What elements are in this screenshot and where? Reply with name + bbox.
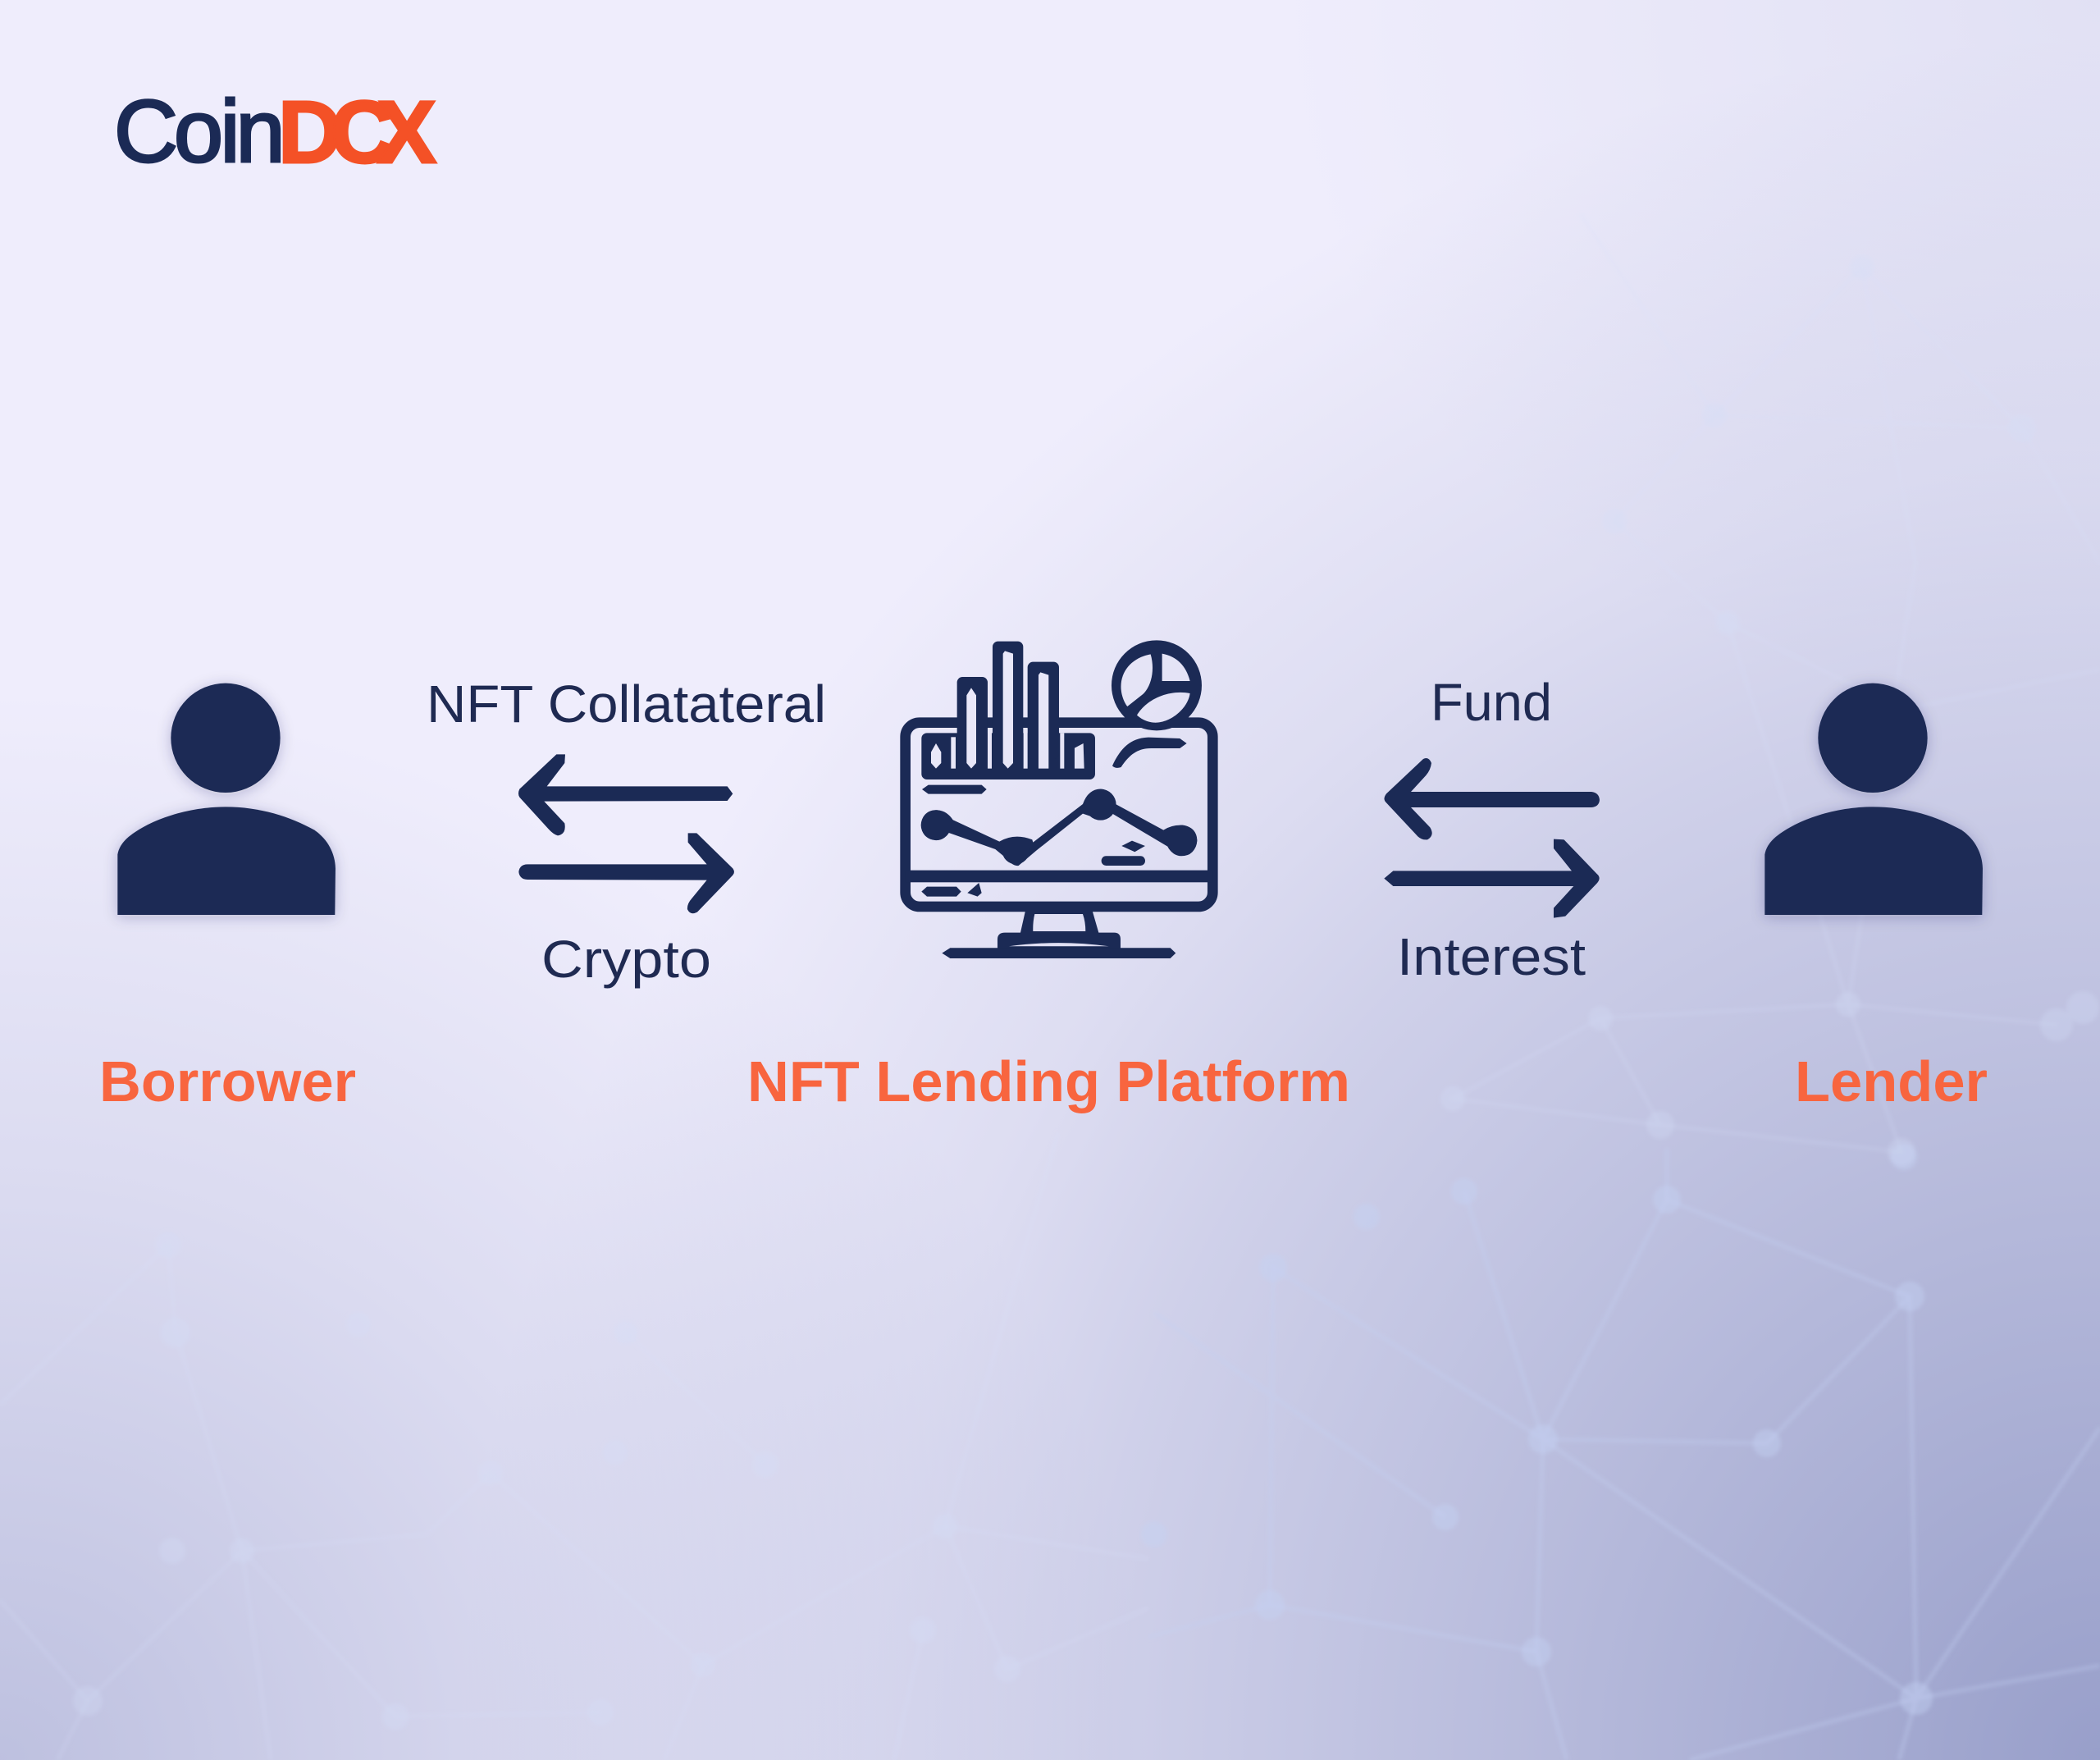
arrows: platform and lender exchange [1384, 758, 1600, 918]
line chart [921, 789, 1197, 866]
arrows: borrower and platform exchange [518, 754, 734, 913]
swoosh [1112, 738, 1187, 768]
label: NFT Collatateral: NFT Collatateral [427, 674, 826, 734]
icon: lender person [1764, 683, 1983, 915]
label: Interest: Interest [1397, 927, 1586, 986]
CoinDCX logo [114, 81, 436, 181]
label: Fund: Fund [1431, 673, 1552, 732]
small marks [1121, 841, 1145, 852]
heading: Borrower: Borrower [99, 1049, 356, 1113]
screen divider [906, 871, 1212, 882]
heading: Lender: Lender [1795, 1049, 1988, 1113]
CoinDCX logo: DCX [278, 82, 436, 181]
CoinDCX logo: Coin [114, 81, 285, 181]
stand base [942, 911, 1176, 958]
pie chart [1112, 640, 1202, 730]
bar chart [921, 642, 1095, 779]
icon: borrower person [117, 683, 336, 915]
heading: NFT Lending Platform: NFT Lending Platform [747, 1049, 1350, 1113]
label: Crypto: Crypto [541, 930, 711, 989]
icon: monitor with charts [906, 640, 1212, 958]
text bar [922, 785, 987, 794]
monitor frame [906, 723, 1212, 907]
